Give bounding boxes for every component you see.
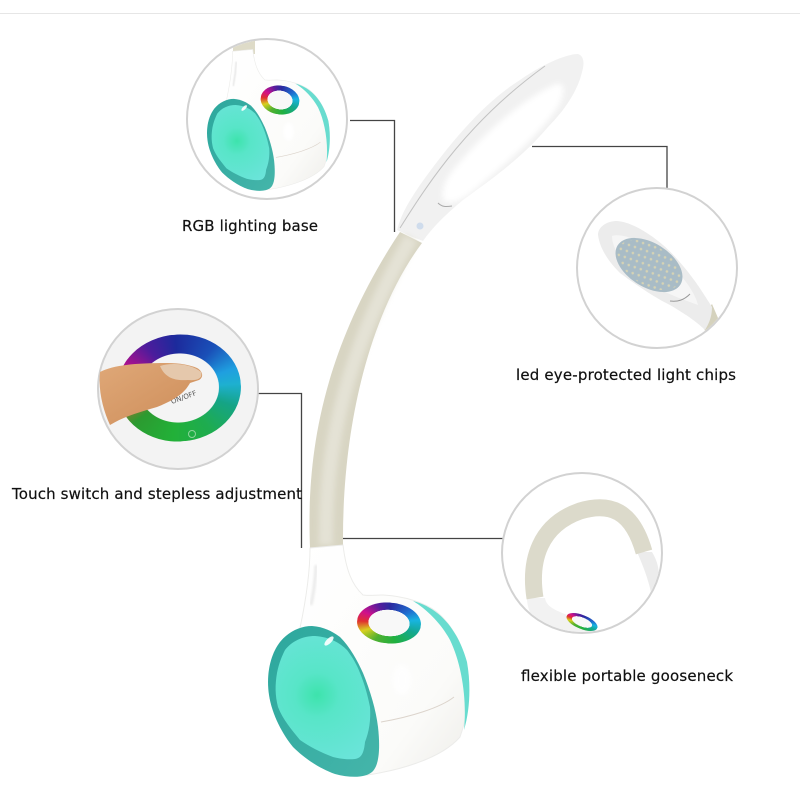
circle frame [502, 473, 662, 633]
colour ring [113, 330, 245, 446]
lamp base [268, 545, 469, 777]
panel: touch switch [98, 309, 258, 469]
lamp head underside [598, 221, 719, 333]
panel: flexible gooseneck [502, 473, 662, 636]
base detail [207, 38, 330, 191]
leader line: RGB base [350, 120, 394, 232]
circle frame [98, 309, 258, 469]
lamp head [397, 54, 583, 241]
leader line: touch switch [258, 394, 302, 548]
leader line: gooseneck [343, 538, 503, 540]
label: touch switch: Touch switch and stepless adjustment [11, 485, 302, 503]
colour touch ring [356, 600, 422, 646]
on/off label: ON/OFF [170, 389, 198, 406]
gooseneck tube [309, 232, 422, 549]
circle frame [187, 39, 347, 199]
label: flexible gooseneck: flexible portable gooseneck [521, 667, 733, 685]
power icon [188, 430, 196, 438]
top rule [0, 13, 800, 14]
bent lamp [527, 508, 659, 636]
panel: LED chips [577, 188, 737, 348]
leader line: LED chips [532, 146, 667, 189]
label: LED chips: led eye-protected light chips [516, 366, 736, 384]
main lamp [268, 54, 583, 777]
label: RGB lighting base: RGB lighting base [182, 217, 318, 235]
panel: RGB lighting base [187, 38, 347, 199]
circle frame [577, 188, 737, 348]
finger [100, 363, 202, 425]
